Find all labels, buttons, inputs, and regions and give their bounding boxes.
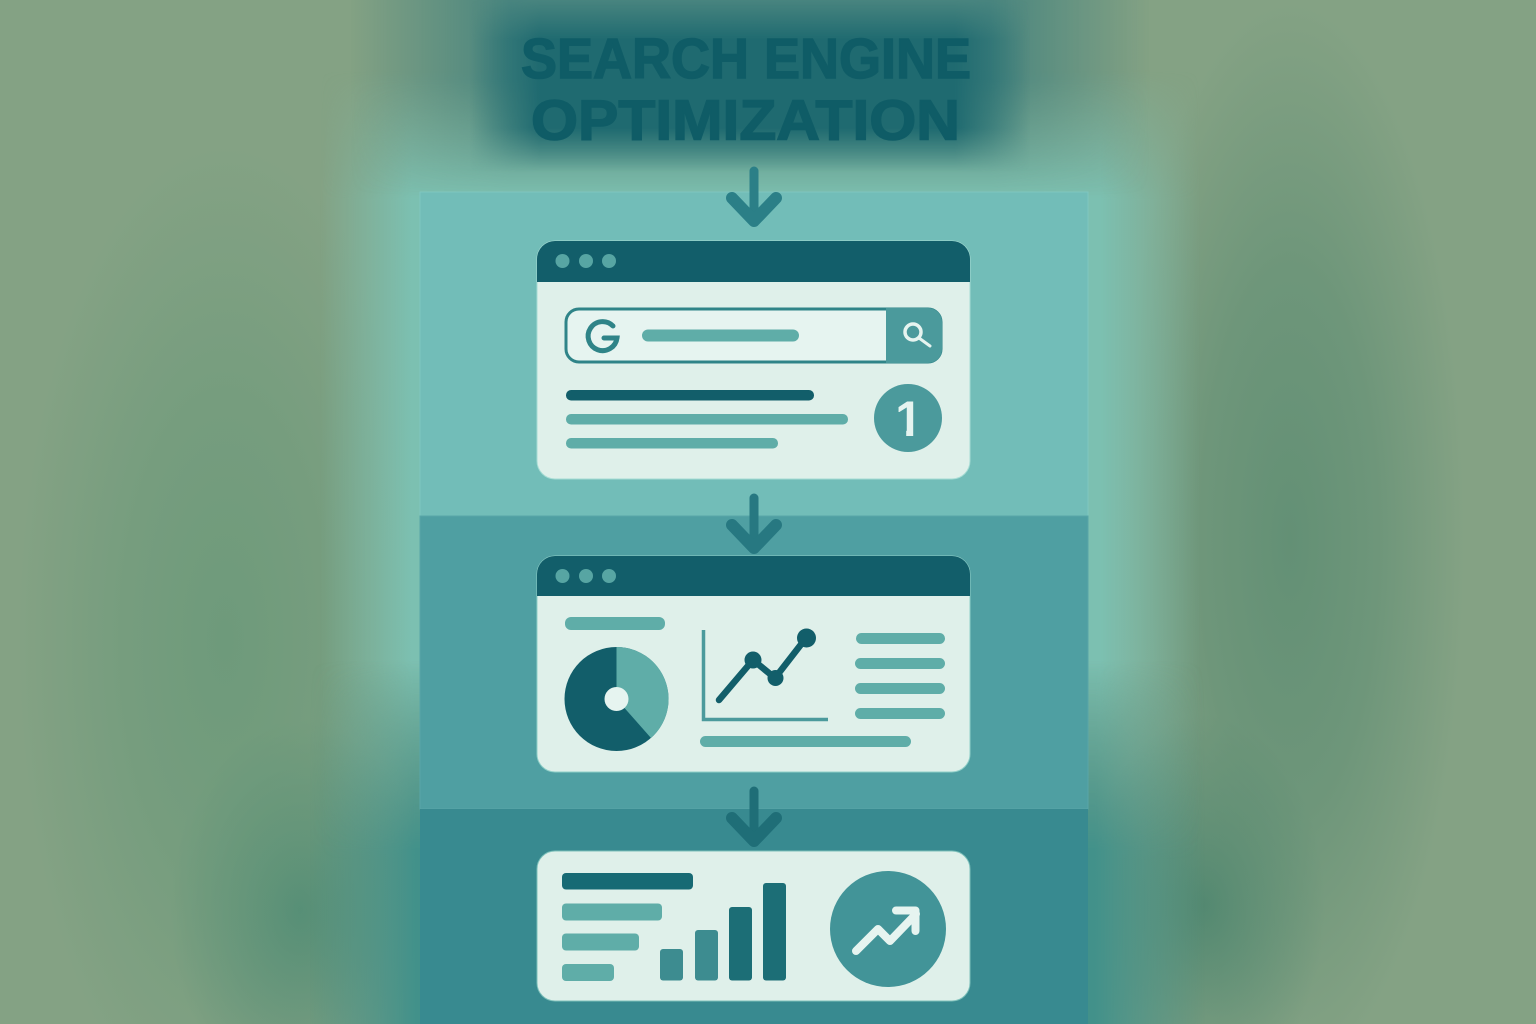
panel: step 1 band — [420, 192, 1088, 516]
caption bar — [700, 736, 911, 747]
panel: step 2 band — [420, 516, 1088, 809]
result line — [566, 414, 848, 424]
line chart — [704, 628, 828, 720]
heading bar — [565, 617, 665, 630]
search bar — [566, 309, 941, 362]
title: OPTIMIZATION — [531, 88, 960, 152]
search button with magnifier — [886, 308, 942, 363]
panel: results window — [537, 851, 970, 1001]
infographic artwork — [420, 38, 1088, 1024]
legend bars — [855, 633, 945, 719]
window title bar — [537, 556, 970, 596]
window dots — [556, 254, 616, 268]
arrow: search to analytics — [732, 498, 776, 548]
window dots — [556, 569, 616, 583]
result line highlighted — [566, 390, 814, 400]
rank badge: 1 — [895, 391, 923, 447]
text bars — [562, 873, 693, 981]
title — [521, 27, 971, 152]
panel: search results window — [537, 241, 970, 479]
arrow: title to search — [732, 171, 776, 221]
rank badge — [874, 384, 942, 452]
panel: step 3 band — [420, 809, 1088, 1024]
window title bar — [537, 241, 970, 282]
inner glow behind title — [478, 8, 1022, 168]
pie chart — [564, 647, 669, 751]
arrow: analytics to results — [732, 791, 776, 841]
outer glow behind title — [372, 0, 1130, 179]
result line — [566, 438, 778, 448]
glow behind lower panel — [326, 684, 1188, 1024]
title: SEARCH ENGINE — [521, 27, 971, 91]
bar chart — [660, 883, 786, 980]
icon: G logo — [588, 322, 617, 351]
search query bar — [642, 330, 799, 342]
icon: growth arrow badge — [830, 871, 946, 987]
panel: analytics window — [537, 556, 970, 772]
glow behind upper panels — [334, 100, 1184, 778]
